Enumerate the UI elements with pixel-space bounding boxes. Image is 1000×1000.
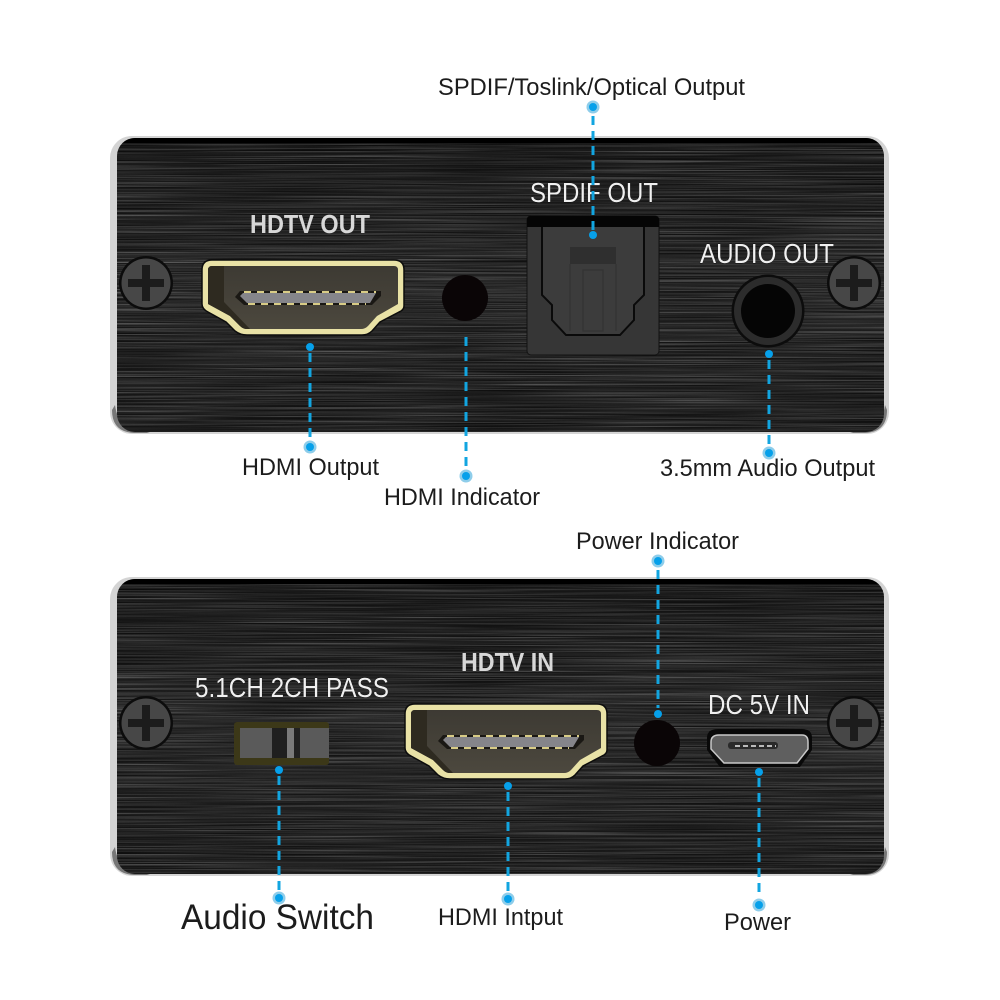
callout: 3.5mm Audio Output: 3.5mm Audio Output: [660, 455, 875, 482]
label: SPDIF OUT: SPDIF OUT: [530, 177, 658, 208]
label: AUDIO OUT: AUDIO OUT: [700, 238, 834, 269]
callout: Power Indicator: Power Indicator: [576, 528, 739, 555]
HDMI indicator light: [442, 275, 488, 321]
callout: Power: [724, 768, 791, 936]
callout: SPDIF/Toslink/Optical Output: [438, 74, 745, 239]
label: DC 5V IN: DC 5V IN: [708, 689, 810, 720]
screw right: [827, 256, 881, 310]
callout: HDMI Intput: HDMI Intput: [438, 904, 563, 931]
panel frame: [110, 136, 889, 434]
label: HDTV OUT: HDTV OUT: [250, 209, 370, 239]
panel frame: [110, 577, 889, 876]
screw left: [119, 256, 173, 310]
panel: bottom device face: [110, 577, 889, 876]
audio jack: [732, 274, 804, 348]
micro USB port: [707, 729, 812, 767]
power indicator light: [634, 720, 680, 766]
label: HDTV IN: HDTV IN: [461, 647, 554, 677]
label: 5.1CH 2CH PASS: 5.1CH 2CH PASS: [195, 672, 389, 703]
callout: Power Indicator: [576, 528, 739, 718]
callout: Audio Switch: Audio Switch: [181, 898, 374, 937]
callout: HDMI Indicator: HDMI Indicator: [384, 484, 540, 511]
callout: HDMI Indicator: [384, 337, 540, 511]
HDMI output port: [202, 260, 404, 335]
HDMI input port: [405, 704, 607, 779]
callout: Audio Switch: [181, 766, 374, 937]
callout: Power: Power: [724, 909, 791, 936]
screw right: [827, 696, 881, 750]
panel: top device face: [110, 136, 889, 434]
optical port: [527, 216, 659, 355]
callout: HDMI Output: HDMI Output: [242, 454, 379, 481]
screw left: [119, 696, 173, 750]
callout: 3.5mm Audio Output: [660, 350, 875, 482]
callout: SPDIF/Toslink/Optical Output: SPDIF/Toslink/Optical Output: [438, 74, 745, 101]
audio slide switch: [234, 722, 329, 765]
callout: HDMI Output: [242, 343, 379, 481]
callout: HDMI Intput: [438, 782, 563, 931]
